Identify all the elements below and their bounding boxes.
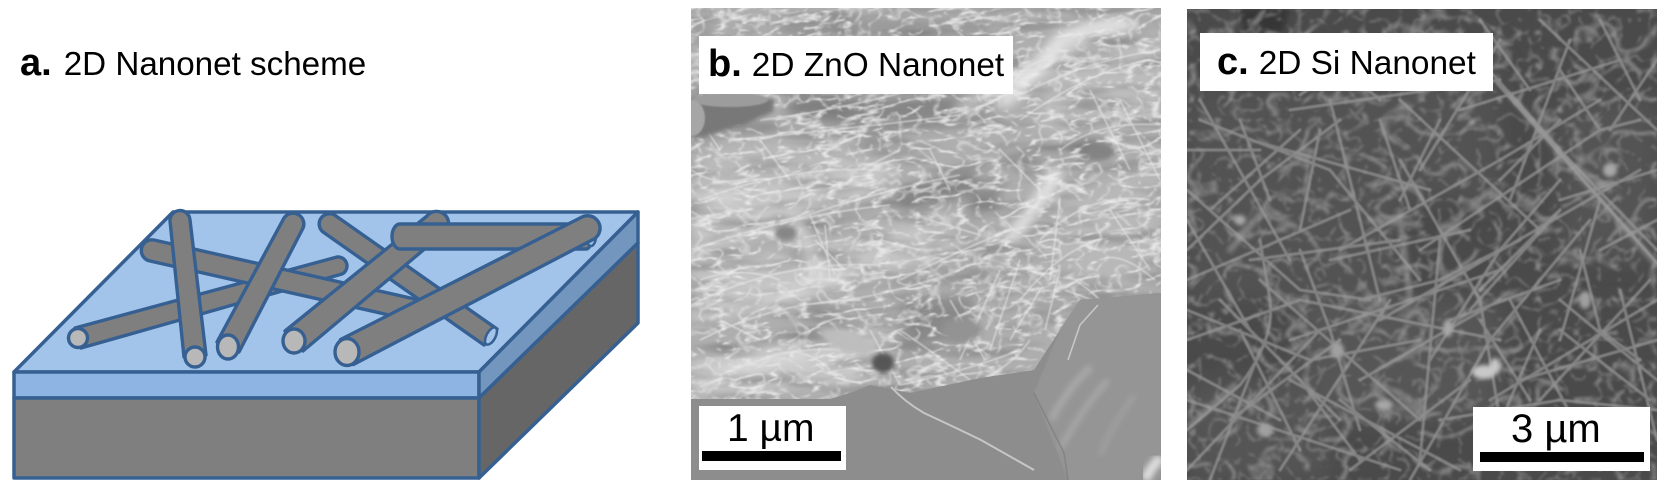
nanowire 4 xyxy=(170,210,206,367)
scale bar b xyxy=(699,406,846,470)
label c xyxy=(1200,33,1493,91)
scale bar c: 3 µm xyxy=(1511,407,1601,451)
diagram: layered substrate with nanowires xyxy=(14,210,638,478)
substrate top surface xyxy=(14,212,638,372)
label b: b. 2D ZnO Nanonet xyxy=(708,43,1005,85)
scale bar b: 1 µm xyxy=(727,407,814,450)
label c: c. 2D Si Nanonet xyxy=(1217,41,1477,83)
nanowire 3 xyxy=(319,214,499,347)
dark voids in fibre mat xyxy=(679,93,1115,355)
SEM photo b xyxy=(691,8,1161,480)
substrate front face xyxy=(14,398,479,478)
nanowires xyxy=(68,210,600,367)
heading a: a. 2D Nanonet scheme xyxy=(20,42,366,84)
coating front edge xyxy=(14,372,479,398)
panel b: SEM image of 2D ZnO nanonet xyxy=(691,8,1161,480)
coating side edge xyxy=(479,212,638,398)
nanowire 7 xyxy=(392,224,596,249)
nanowire 2 xyxy=(141,240,428,322)
SEM photo c xyxy=(1187,9,1657,480)
nanowire 1 xyxy=(68,257,347,348)
nanowire 5 xyxy=(217,213,304,359)
panel c: SEM image of 2D Si nanonet xyxy=(1187,9,1657,480)
panel a: 2D Nanonet scheme xyxy=(14,42,638,478)
nanowire 8 xyxy=(335,216,600,366)
label b xyxy=(699,36,1013,94)
nanowire 6 xyxy=(283,211,449,353)
scale bar c xyxy=(1473,407,1650,471)
substrate side face xyxy=(479,243,638,478)
